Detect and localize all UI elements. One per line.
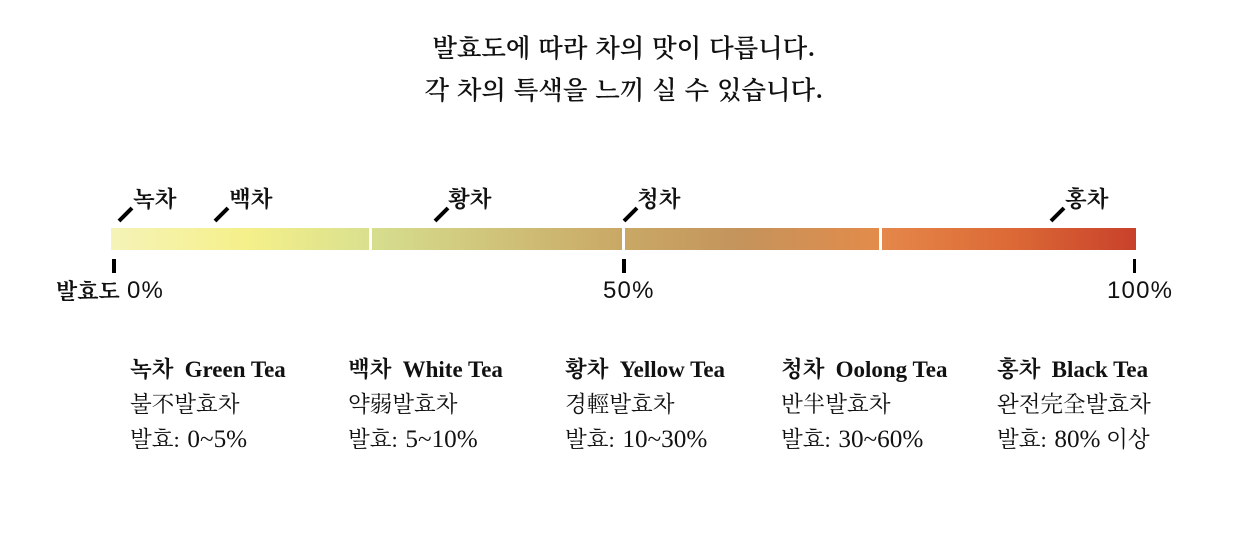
description: oolong tea: 청차 Oolong Tea <box>781 357 947 382</box>
description: black tea: 완전完全발효차 <box>997 392 1151 417</box>
description: oolong tea <box>781 357 948 453</box>
tick: 0% <box>112 259 116 273</box>
tick: 50% <box>622 259 626 273</box>
marker: green tea: 녹차 <box>133 182 176 214</box>
description: white tea: 백차 White Tea <box>348 357 503 382</box>
axis label: 50%: 50% <box>603 277 655 304</box>
pointer: yellow tea <box>434 206 450 222</box>
pointer: oolong tea <box>622 206 638 222</box>
description: yellow tea: 발효: 10~30% <box>565 426 707 453</box>
description: yellow tea: 경輕발효차 <box>565 392 674 417</box>
title <box>424 29 824 107</box>
description: white tea: 발효: 5~10% <box>348 426 478 453</box>
marker: white tea: 백차 <box>229 182 272 214</box>
description: yellow tea: 황차 Yellow Tea <box>565 357 725 382</box>
description: black tea: 발효: 80% 이상 <box>997 426 1150 453</box>
marker: yellow tea: 황차 <box>448 182 491 214</box>
marker: oolong tea: 청차 <box>637 182 680 214</box>
gradient bar <box>111 228 1136 250</box>
title: 각 차의 특색을 느끼 실 수 있습니다. <box>424 71 824 107</box>
description: black tea: 홍차 Black Tea <box>997 357 1148 382</box>
description: green tea <box>130 357 286 453</box>
axis label: 100%: 100% <box>1107 277 1173 304</box>
description: white tea <box>348 357 503 453</box>
description: green tea: 불不발효차 <box>130 392 239 417</box>
description: black tea <box>997 357 1151 453</box>
description: green tea: 발효: 0~5% <box>130 426 247 453</box>
axis label: 0% <box>56 275 164 306</box>
description: oolong tea: 반半발효차 <box>781 392 890 417</box>
description: yellow tea <box>565 357 725 453</box>
description: green tea: 녹차 Green Tea <box>130 357 286 382</box>
axis label: 0%: 0% <box>127 277 164 304</box>
marker: black tea: 홍차 <box>1065 182 1108 214</box>
description: oolong tea: 발효: 30~60% <box>781 426 923 453</box>
pointer: green tea <box>118 206 134 222</box>
pointer: white tea <box>214 206 230 222</box>
pointer: black tea <box>1050 206 1066 222</box>
title: 발효도에 따라 차의 맛이 다릅니다. <box>432 29 816 65</box>
axis label: 0%: 발효도 <box>56 275 120 306</box>
fermentation scale chart <box>56 182 1173 306</box>
description: white tea: 약弱발효차 <box>348 392 457 417</box>
tick: 100% <box>1132 259 1136 273</box>
